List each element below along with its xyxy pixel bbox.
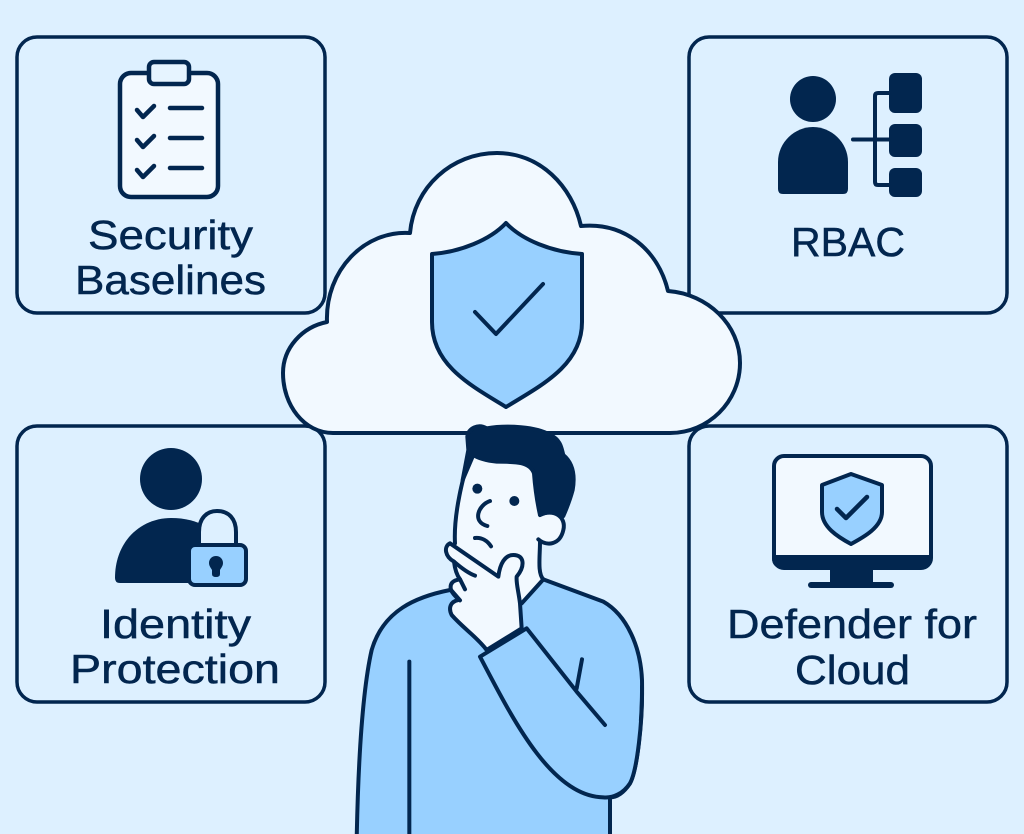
heading: defender for cloud (727, 601, 977, 693)
heading: defender for cloud: Defender for (727, 601, 977, 647)
heading: identity protection: Identity (100, 601, 252, 647)
ear (538, 513, 564, 544)
sleeve and arm (480, 628, 642, 797)
torso crease (403, 662, 415, 834)
icon: user with padlock (115, 448, 246, 585)
hair (463, 426, 574, 516)
panel: rbac (689, 37, 1007, 313)
icon: monitor with shield (772, 456, 932, 588)
heading: rbac: RBAC (791, 219, 905, 265)
sweater body (357, 579, 642, 834)
heading: security baselines: Baselines (75, 257, 266, 303)
icon: shield with check (432, 223, 582, 407)
heading: identity protection: Protection (70, 646, 280, 692)
panel: security baselines (17, 37, 325, 313)
face and neck (455, 453, 563, 603)
cloud with shield (283, 153, 740, 433)
heading: security baselines (75, 212, 266, 303)
thinking man (357, 426, 642, 834)
heading: security baselines: Security (88, 212, 254, 258)
finger lines (451, 562, 475, 600)
nose and mouth (475, 501, 491, 546)
panel: defender for cloud (689, 426, 1007, 702)
panel: identity protection (17, 426, 325, 702)
hand (446, 543, 523, 650)
heading: identity protection (70, 601, 280, 692)
icon: clipboard checklist (120, 62, 218, 197)
heading: defender for cloud: Cloud (795, 647, 910, 693)
icon: user with role hierarchy (778, 73, 922, 197)
eyes (472, 484, 482, 494)
